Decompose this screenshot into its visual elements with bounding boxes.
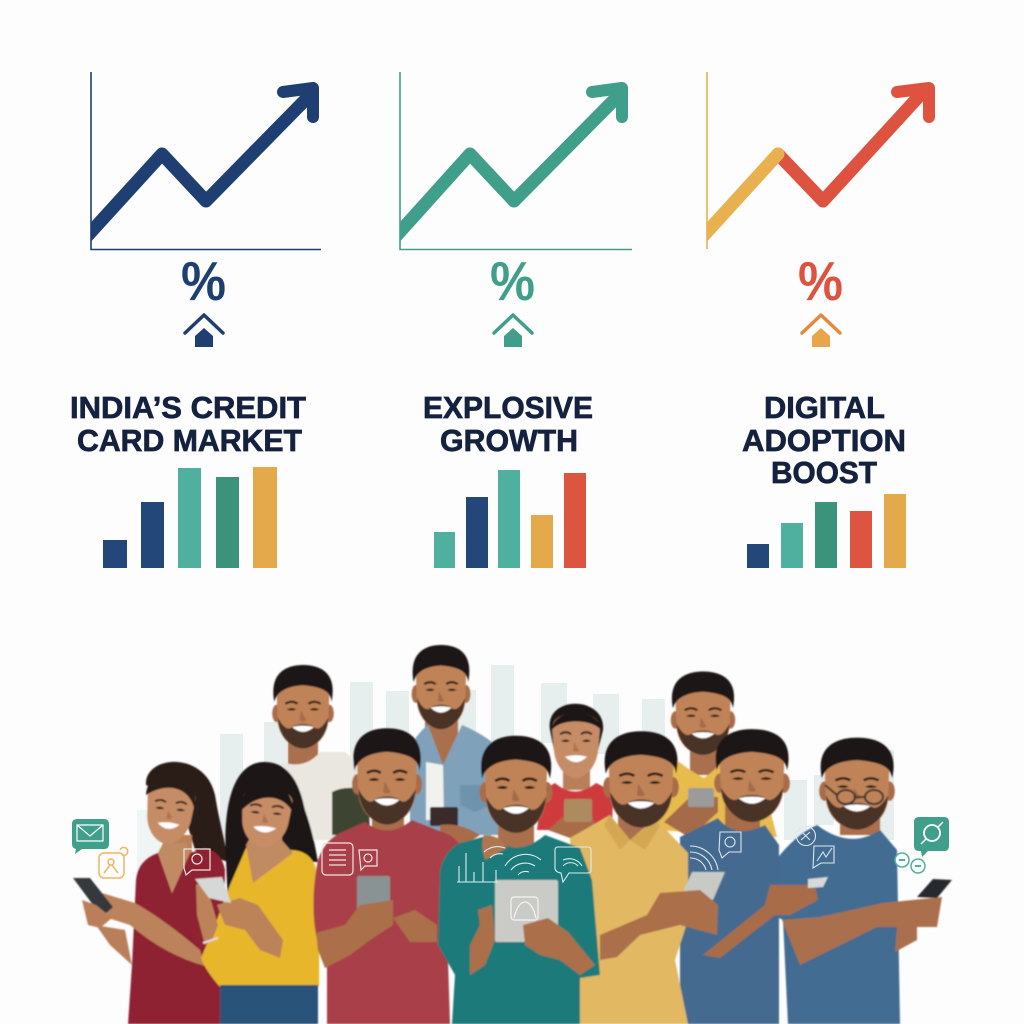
icon: orange outlined key badge — [99, 847, 128, 878]
icon: teal envelope bubble — [72, 819, 109, 854]
icon: house teal — [494, 315, 532, 347]
person: man with glasses in blue tee — [773, 738, 952, 1024]
percent sign: teal: % — [490, 250, 535, 312]
icon: house orange — [802, 315, 840, 347]
heading: digital adoption boost: BOOST — [771, 455, 877, 490]
bar chart 3 — [747, 494, 906, 568]
heading: India's credit card market: CARD MARKET — [77, 423, 302, 458]
icon: white outlined list badge on red tee — [322, 843, 377, 875]
person: man in teal tee — [438, 736, 600, 1024]
person: woman in maroon top — [73, 762, 228, 1024]
icon: teal target bubble — [914, 817, 949, 857]
icon: house navy — [185, 315, 223, 347]
percent sign: navy: % — [181, 250, 226, 312]
person: man in red tee — [313, 728, 463, 1024]
person: man in white tee, back row — [272, 665, 370, 840]
line chart: navy — [80, 72, 321, 250]
heading: explosive growth: GROWTH — [440, 423, 578, 458]
background faded bar chart — [137, 665, 894, 870]
heading: explosive growth: EXPLOSIVE — [423, 390, 593, 425]
icon: white outlined signal and bubble on blue tee — [690, 832, 741, 870]
icon: white outlined badges on shoulder — [796, 826, 834, 868]
heading: India's credit card market — [70, 390, 306, 458]
person: woman in red top, back row — [537, 704, 613, 838]
bar chart 2 — [434, 470, 586, 568]
person: man in yellow tee, back row — [655, 671, 777, 838]
person: woman in yellow shirt — [195, 762, 319, 1024]
bar chart 1 — [103, 467, 277, 568]
heading: digital adoption boost — [742, 390, 906, 490]
heading: India's credit card market: INDIA’S CREDIT — [70, 390, 306, 425]
heading: digital adoption boost: DIGITAL — [764, 390, 885, 425]
line chart: orange and red — [696, 72, 938, 250]
person: man in mustard polo — [570, 731, 725, 1024]
percent sign: red: % — [798, 250, 843, 312]
icon: white outlined bubble on maroon top — [184, 849, 210, 875]
icon: white outlined bars and signal on teal tee — [457, 847, 591, 882]
group of people using phones — [73, 645, 952, 1024]
icon: small teal circles — [895, 853, 925, 873]
heading: digital adoption boost: ADOPTION — [742, 423, 906, 458]
icon: white outlined picture on tablet — [511, 897, 538, 920]
person: man in denim shirt, back row — [410, 645, 500, 845]
line chart: teal — [389, 72, 632, 250]
heading: explosive growth — [423, 390, 593, 458]
person: man in blue tee — [680, 729, 828, 1024]
